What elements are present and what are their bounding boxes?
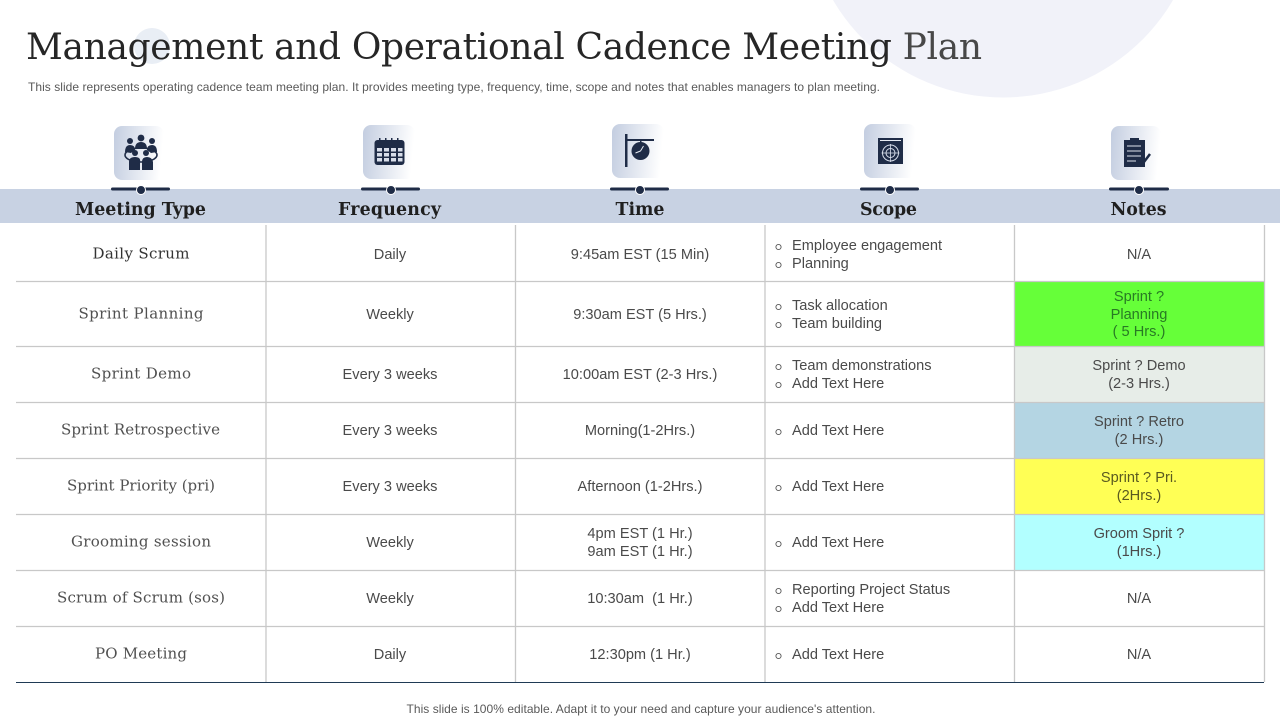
column: Meeting Type header — [75, 126, 206, 220]
row: Sprint Demo — [91, 358, 1186, 392]
column: Time header — [610, 124, 669, 220]
row: Daily Scrum: N/A — [1127, 247, 1151, 263]
row: Sprint Planning: Planning — [1111, 307, 1167, 323]
icon: target window — [864, 124, 916, 178]
row: Sprint Retrospective: Sprint ? Retro — [1094, 414, 1184, 430]
row: Sprint Priority (pri): (2Hrs.) — [1117, 488, 1161, 504]
row: Sprint Priority (pri): Add Text Here — [792, 479, 884, 495]
heading: Frequency — [338, 200, 442, 220]
row: Sprint Retrospective: Morning(1-2Hrs.) — [585, 423, 695, 439]
table grid — [16, 225, 1264, 682]
subtitle: This slide represents operating cadence team meeting plan. It provides meeting type, frequency, time, scope and notes that enables managers to plan meeting. — [28, 80, 880, 94]
heading: Notes — [1110, 200, 1167, 220]
row: PO Meeting — [95, 644, 1151, 663]
row: Grooming session: 4pm EST (1 Hr.) — [587, 526, 693, 542]
row: Sprint Planning: 9:30am EST (5 Hrs.) — [573, 307, 707, 323]
decorative circle, top right — [806, 0, 1200, 98]
row: Sprint Demo: Sprint Demo — [91, 364, 191, 382]
row: Grooming session: Groom Sprit ? — [1094, 526, 1184, 542]
footer note: This slide is 100% editable. Adapt it to your need and capture your audience's attention. — [406, 702, 876, 716]
row: Sprint Priority (pri): Afternoon (1-2Hrs.) — [578, 479, 702, 495]
row: Scrum of Scrum (sos): Add Text Here — [792, 600, 884, 616]
row: Sprint Planning: Team building — [792, 316, 882, 332]
heading: Time — [616, 200, 664, 220]
column: Scope header — [860, 124, 919, 220]
row: Sprint Retrospective: Add Text Here — [792, 423, 884, 439]
connector — [361, 186, 420, 194]
row: Scrum of Scrum (sos): 10:30am (1 Hr.) — [587, 591, 693, 607]
row: Scrum of Scrum (sos): Weekly — [366, 591, 414, 607]
row: Grooming session: Grooming session — [71, 532, 211, 550]
title: Management and Operational Cadence Meeting Plan — [26, 27, 982, 68]
column: Notes header — [1109, 126, 1169, 220]
row: Daily Scrum: 9:45am EST (15 Min) — [571, 247, 709, 263]
row: Sprint Planning: Sprint Planning — [78, 304, 204, 322]
row: Grooming session — [71, 526, 1184, 560]
row: Sprint Demo: (2-3 Hrs.) — [1108, 376, 1170, 392]
heading: Scope — [860, 200, 917, 220]
row: PO Meeting: PO Meeting — [95, 644, 187, 662]
row: Sprint Priority (pri) — [67, 470, 1177, 504]
row: Sprint Retrospective: Every 3 weeks — [343, 423, 437, 439]
icon: clipboard and pen — [1111, 126, 1161, 180]
row: Daily Scrum — [92, 238, 1151, 272]
table header band — [0, 189, 1280, 223]
row: Daily Scrum: Employee engagement — [792, 238, 942, 254]
row: Scrum of Scrum (sos) — [57, 582, 1151, 616]
row: PO Meeting: Daily — [374, 647, 407, 663]
icon: calendar — [363, 125, 415, 179]
icon: people meeting — [114, 126, 164, 180]
row: Grooming session: 9am EST (1 Hr.) — [587, 544, 693, 560]
row: Sprint Planning: Sprint ? — [1114, 289, 1164, 305]
connector — [860, 186, 919, 194]
row: PO Meeting: 12:30pm (1 Hr.) — [589, 647, 691, 663]
row: Sprint Priority (pri): Sprint Priority (pri) — [67, 476, 215, 494]
row: Grooming session: Weekly — [366, 535, 414, 551]
connector — [1109, 186, 1169, 194]
row: PO Meeting: Add Text Here — [792, 647, 884, 663]
column: Frequency header — [338, 125, 442, 220]
row: PO Meeting: N/A — [1127, 647, 1151, 663]
row: Sprint Planning: Task allocation — [792, 298, 888, 314]
row: Sprint Demo: 10:00am EST (2-3 Hrs.) — [563, 367, 717, 383]
row: Scrum of Scrum (sos): Reporting Project Status — [792, 582, 950, 598]
row: Sprint Retrospective — [61, 414, 1184, 448]
row: Sprint Demo: Sprint ? Demo — [1092, 358, 1186, 374]
row: Daily Scrum: Planning — [792, 256, 849, 272]
connector — [610, 186, 669, 194]
row: Sprint Planning: Weekly — [366, 307, 414, 323]
row: Sprint Priority (pri): Sprint ? Pri. — [1101, 470, 1177, 486]
row: Sprint Demo: Team demonstrations — [792, 358, 932, 374]
row: Sprint Retrospective: (2 Hrs.) — [1115, 432, 1163, 448]
row: Sprint Planning — [78, 289, 1167, 340]
row: Sprint Demo: Every 3 weeks — [343, 367, 437, 383]
connector — [111, 186, 170, 194]
row: Grooming session: Add Text Here — [792, 535, 884, 551]
row: Daily Scrum: Daily Scrum — [92, 244, 190, 262]
row: Sprint Retrospective: Sprint Retrospective — [61, 420, 220, 438]
row: Scrum of Scrum (sos): N/A — [1127, 591, 1151, 607]
decorative hatched circle behind title — [134, 28, 170, 64]
row: Sprint Planning: ( 5 Hrs.) — [1113, 324, 1165, 340]
row: Grooming session: (1Hrs.) — [1117, 544, 1161, 560]
row: Sprint Priority (pri): Every 3 weeks — [343, 479, 437, 495]
icon: hanging clock — [612, 124, 664, 178]
notes highlighted cells — [1015, 282, 1264, 570]
row: Sprint Demo: Add Text Here — [792, 376, 884, 392]
heading: Meeting Type — [75, 200, 206, 220]
row: Daily Scrum: Daily — [374, 247, 407, 263]
row: Scrum of Scrum (sos): Scrum of Scrum (sos) — [57, 588, 225, 606]
